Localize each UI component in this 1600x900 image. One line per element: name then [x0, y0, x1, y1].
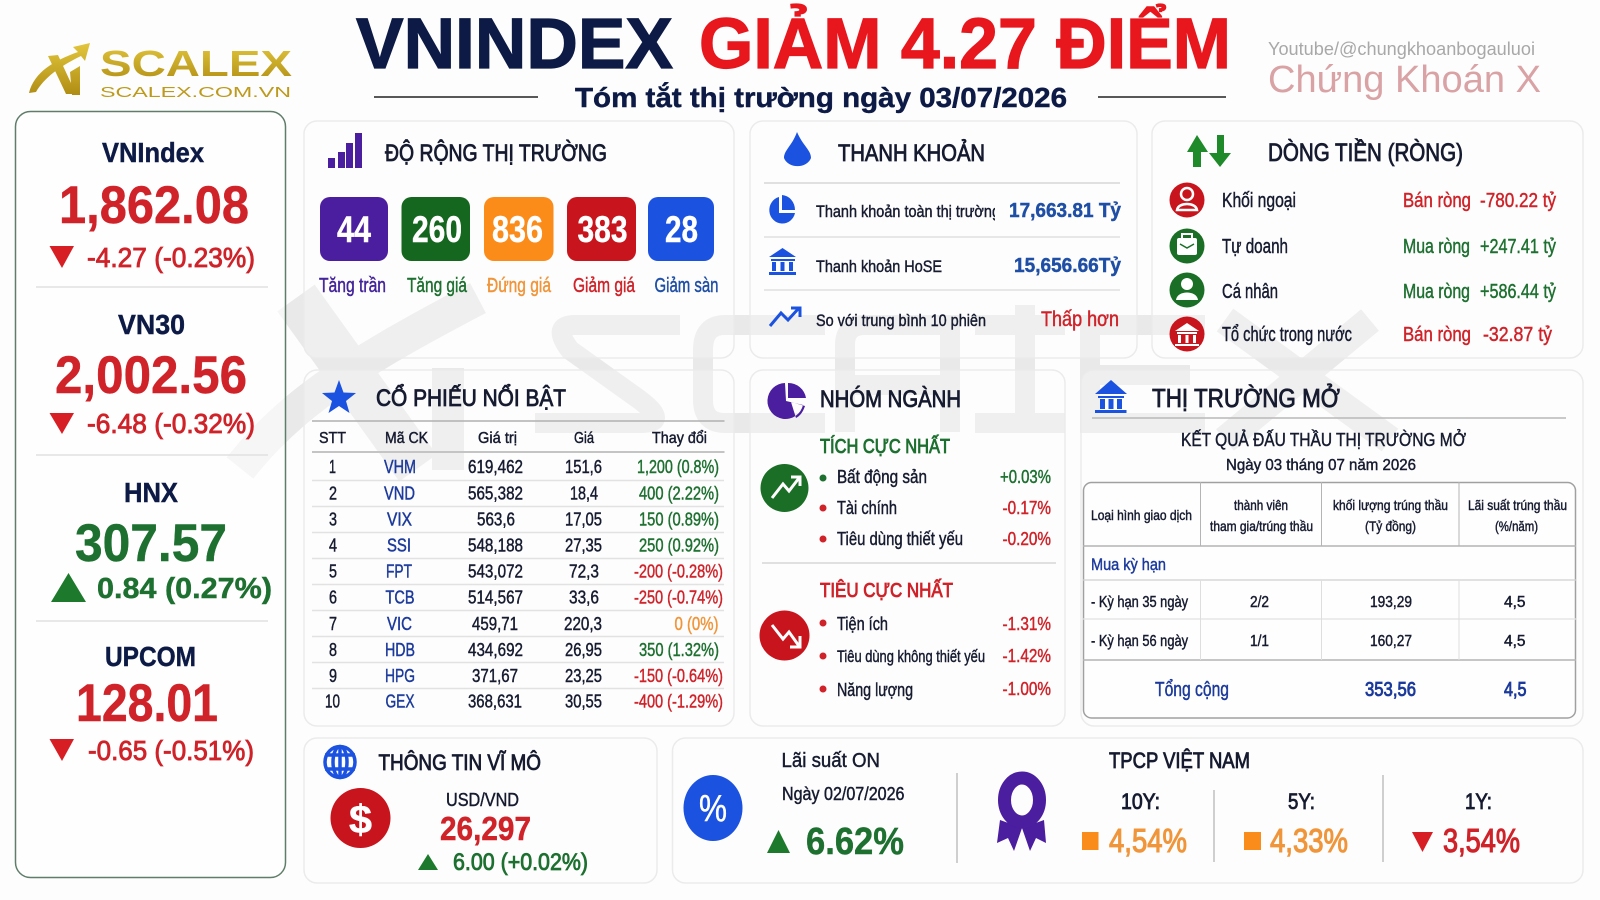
- auction table: [1083, 482, 1576, 718]
- table date: Ngày 03 tháng 07 năm 2026: [1226, 457, 1416, 474]
- row 3: 150 (0.89%): [639, 510, 719, 530]
- row: 56 days: 4,5: [1504, 633, 1526, 650]
- row: 35 days: 2/2: [1250, 594, 1269, 611]
- heading: THÔNG TIN VĨ MÔ: [378, 750, 541, 775]
- stat: ceiling: [319, 197, 388, 297]
- title: index name: VNINDEX: [356, 5, 673, 84]
- row 2: 400 (2.22%): [639, 484, 719, 504]
- row: 56 days: [1091, 633, 1526, 650]
- row: individuals: [1170, 272, 1556, 308]
- row 1: 1,200 (0.8%): [637, 457, 719, 477]
- logo: SCALEX: [29, 43, 292, 101]
- row: 35 days: 193,29: [1370, 594, 1412, 611]
- UPCOM block: -0.65 (-0.51%): [88, 735, 254, 766]
- worst sectors: Tiêu dùng không thiết yếu: [837, 647, 985, 666]
- HNX block: HNX: [124, 477, 178, 508]
- watermark: SCALEX logo: [240, 298, 1390, 470]
- UPCOM block: UPCOM: [105, 641, 196, 672]
- icon: drop: [784, 132, 811, 166]
- icon: up and down arrows: [1187, 135, 1231, 167]
- row: domestic institutions: [1170, 316, 1552, 352]
- VNIndex block: -4.27 (-0.23%): [87, 242, 255, 273]
- row 2: 2: [329, 484, 337, 504]
- bond 10Y: [1082, 789, 1187, 859]
- row: total: [1155, 679, 1526, 701]
- table header: Thay đổi: [652, 429, 707, 447]
- stat: flat: [484, 197, 554, 297]
- row: 10 session comparison: [770, 308, 1119, 331]
- row 4: 4: [329, 536, 337, 556]
- row 5: FPT: [386, 562, 412, 582]
- row 5: 5: [329, 562, 337, 582]
- row 1: VHM: [384, 457, 416, 477]
- overnight rate: Ngày 02/07/2026: [782, 784, 904, 804]
- row: proprietary: Mua ròng: [1403, 236, 1470, 258]
- table header: tham gia/trúng thầu: [1210, 518, 1313, 534]
- worst sectors: -1.42%: [1002, 646, 1051, 666]
- title: [356, 4, 1231, 84]
- row: HoSE: 15,656.66Tỷ: [1014, 255, 1122, 277]
- row: foreign: [1170, 182, 1556, 218]
- VNIndex block: [50, 137, 255, 273]
- best sectors: [760, 435, 1051, 549]
- row 10: -400 (-1.29%): [634, 692, 723, 712]
- logo wordmark: SCALEX: [100, 43, 292, 84]
- row: proprietary: [1170, 228, 1556, 264]
- stat: up: Tăng giá: [407, 275, 468, 297]
- stat: down: Giảm giá: [573, 275, 636, 297]
- row: foreign: -780.22 tỷ: [1480, 190, 1556, 212]
- row: proprietary: Tự doanh: [1222, 236, 1288, 258]
- row 5: 72,3: [569, 562, 599, 582]
- USD/VND stat: 26,297: [440, 810, 531, 847]
- bond 1Y: 1Y:: [1465, 789, 1492, 814]
- heading: CỔ PHIẾU NỔI BẬT: [376, 384, 566, 412]
- heading: THỊ TRƯỜNG MỞ: [1152, 382, 1340, 413]
- table header: Giá: [574, 430, 594, 447]
- row: 56 days: 1/1: [1250, 633, 1269, 650]
- VNIndex block: VNIndex: [102, 137, 204, 168]
- row 8: HDB: [385, 640, 415, 660]
- icon: ribbon: [997, 778, 1046, 851]
- row 5: 543,072: [468, 562, 523, 582]
- row 8: 8: [329, 640, 337, 660]
- bond 10Y: 10Y:: [1121, 789, 1160, 814]
- row 4: [329, 536, 719, 556]
- panel: net cash flow: [1152, 121, 1583, 358]
- stat: down: 383: [578, 209, 628, 250]
- panel: indices: [16, 112, 286, 878]
- stat: flat: Đứng giá: [487, 275, 552, 297]
- worst sectors: -1.00%: [1002, 679, 1051, 699]
- row 2: 565,382: [468, 484, 523, 504]
- row: 56 days: - Kỳ hạn 56 ngày: [1091, 633, 1188, 650]
- row: foreign: Bán ròng: [1403, 190, 1471, 212]
- row 6: 514,567: [468, 588, 523, 608]
- row: 56 days: 160,27: [1370, 633, 1412, 650]
- HNX block: 307.57: [75, 514, 227, 573]
- worst sectors: TIÊU CỰC NHẤT: [820, 579, 953, 602]
- row 2: [329, 484, 719, 504]
- row 10: 368,631: [468, 692, 522, 712]
- row 9: 371,67: [472, 666, 518, 686]
- row: whole market: Thanh khoản toàn thị trường: [816, 202, 1000, 221]
- heading: THANH KHOẢN: [838, 138, 985, 167]
- row: total: 4,5: [1504, 679, 1526, 701]
- row 1: 1: [329, 457, 336, 477]
- row 10: GEX: [386, 692, 414, 712]
- VNIndex block: 1,862.08: [59, 176, 249, 235]
- row: individuals: Mua ròng: [1403, 281, 1470, 303]
- row 8: [329, 640, 719, 660]
- section label: Mua kỳ hạn: [1091, 555, 1166, 574]
- VN30 block: 2,002.56: [55, 346, 247, 405]
- row: total: Tổng cộng: [1155, 679, 1229, 701]
- row: 35 days: - Kỳ hạn 35 ngày: [1091, 594, 1188, 611]
- channel name: Chứng Khoán X: [1268, 59, 1541, 101]
- row 10: 10: [325, 692, 340, 712]
- row 1: 151,6: [565, 457, 602, 477]
- table header: thành viên: [1234, 497, 1288, 513]
- table header: Giá trị: [478, 430, 517, 447]
- best sectors: -0.17%: [1002, 498, 1051, 518]
- USD/VND stat: 6.00 (+0.02%): [453, 849, 588, 876]
- row: whole market: 17,663.81 Tỷ: [1009, 200, 1122, 222]
- table header: Lãi suất trúng thầu: [1468, 497, 1567, 513]
- subtitle: Tóm tắt thị trường ngày 03/07/2026: [575, 82, 1067, 113]
- worst sectors: [760, 579, 1051, 700]
- worst sectors: -1.31%: [1002, 614, 1051, 634]
- row 5: [329, 562, 723, 582]
- worst sectors: Năng lượng: [837, 680, 913, 700]
- channel credit: [1268, 39, 1541, 101]
- panel: liquidity: [750, 121, 1137, 358]
- UPCOM block: 128.01: [76, 674, 218, 733]
- icon: dollar: [330, 788, 390, 848]
- row: foreign: Khối ngoại: [1222, 190, 1296, 212]
- UPCOM block: [50, 641, 254, 766]
- table header: STT: [319, 430, 346, 447]
- icon: bank: [1095, 380, 1127, 413]
- row 7: [329, 614, 718, 634]
- heading: ĐỘ RỘNG THỊ TRƯỜNG: [385, 139, 607, 167]
- row: 10 session comparison: So với trung bình 10 phiên: [816, 311, 986, 330]
- row 6: TCB: [386, 588, 414, 608]
- icon: star: [322, 380, 356, 413]
- best sectors: +0.03%: [1000, 467, 1051, 487]
- icon: percent: %: [699, 788, 727, 830]
- row 7: 459,71: [472, 614, 518, 634]
- row: proprietary: +247.41 tỷ: [1480, 236, 1556, 258]
- overnight rate: Lãi suất ON: [782, 750, 880, 772]
- HNX block: [51, 477, 272, 605]
- row 3: 563,6: [477, 510, 515, 530]
- table rows: [312, 457, 724, 712]
- row 7: 7: [329, 614, 337, 634]
- row: domestic institutions: Bán ròng: [1403, 324, 1471, 346]
- VN30 block: [50, 309, 255, 439]
- panel: market breadth: [304, 121, 734, 358]
- icon: dollar: $: [349, 798, 372, 842]
- row 3: [329, 510, 719, 530]
- stat: ceiling: Tăng trần: [319, 275, 386, 297]
- row 1: 619,462: [468, 457, 523, 477]
- best sectors: Bất động sản: [837, 467, 927, 487]
- overnight rate: 6.62%: [806, 821, 904, 863]
- row: domestic institutions: Tổ chức trong nước: [1222, 324, 1352, 346]
- best sectors: Tài chính: [837, 498, 897, 518]
- best sectors: Tiêu dùng thiết yếu: [837, 529, 963, 549]
- heading: NHÓM NGÀNH: [820, 386, 961, 413]
- panel: rates and bonds: [672, 738, 1583, 883]
- row 3: 17,05: [565, 510, 602, 530]
- bond 1Y: [1412, 789, 1520, 859]
- panel: open market: [1081, 370, 1583, 726]
- bond 1Y: 3,54%: [1443, 822, 1520, 859]
- stat: up: [402, 197, 470, 297]
- logo mark: [29, 43, 90, 95]
- table title: KẾT QUẢ ĐẤU THẦU THỊ TRƯỜNG MỞ: [1181, 429, 1466, 450]
- worst sectors: Tiện ích: [837, 614, 888, 634]
- row 1: [329, 457, 719, 477]
- row 6: 6: [329, 588, 337, 608]
- stat: flat: 836: [492, 209, 543, 250]
- bond 5Y: 4,33%: [1270, 822, 1348, 859]
- row 9: 9: [329, 666, 337, 686]
- row 10: [325, 692, 723, 712]
- row 8: 26,95: [565, 640, 602, 660]
- row 6: 33,6: [569, 588, 599, 608]
- row 7: 220,3: [564, 614, 602, 634]
- row 6: -250 (-0.74%): [634, 588, 723, 608]
- table header: Loại hình giao dịch: [1091, 507, 1192, 523]
- bond 10Y: 4,54%: [1109, 822, 1187, 859]
- row: whole market: [769, 195, 1122, 224]
- USD/VND stat: [418, 790, 588, 876]
- row 4: SSI: [387, 536, 411, 556]
- row 9: 23,25: [565, 666, 602, 686]
- row 3: VIX: [387, 510, 412, 530]
- row 8: 434,692: [468, 640, 523, 660]
- logo url: SCALEX.COM.VN: [100, 84, 291, 101]
- overnight rate: [767, 750, 904, 863]
- VN30 block: -6.48 (-0.32%): [87, 408, 255, 439]
- icon: pie: [767, 383, 806, 419]
- row: individuals: Cá nhân: [1222, 281, 1278, 303]
- row: 10 session comparison: Thấp hơn: [1041, 308, 1119, 331]
- table header: (%/năm): [1495, 518, 1538, 534]
- row: domestic institutions: -32.87 tỷ: [1483, 324, 1552, 346]
- row 3: 3: [329, 510, 337, 530]
- panel: sectors: [750, 370, 1065, 726]
- table header: khối lượng trúng thầu: [1333, 497, 1448, 513]
- row 7: VIC: [387, 614, 412, 634]
- best sectors: -0.20%: [1002, 529, 1051, 549]
- panel: macro info: [304, 738, 657, 883]
- stat: floor: 28: [665, 209, 698, 250]
- row: individuals: +586.44 tỷ: [1480, 281, 1556, 303]
- stat: down: [567, 197, 636, 297]
- title: change: GIẢM 4.27 ĐIỂM: [699, 4, 1231, 84]
- heading: DÒNG TIỀN (RÒNG): [1268, 138, 1463, 167]
- table header: Mã CK: [385, 430, 428, 447]
- row: total: 353,56: [1365, 679, 1416, 701]
- row 2: 18,4: [570, 484, 598, 504]
- bond 5Y: 5Y:: [1288, 789, 1315, 814]
- table header: [319, 429, 707, 447]
- stat: ceiling: 44: [337, 209, 371, 250]
- row 7: 0 (0%): [674, 614, 718, 634]
- stat: floor: [648, 197, 718, 297]
- youtube handle: Youtube/@chungkhoanbogauluoi: [1268, 39, 1535, 59]
- row 5: -200 (-0.28%): [634, 562, 723, 582]
- row 9: [329, 666, 723, 686]
- row 4: 250 (0.92%): [639, 536, 719, 556]
- HNX block: 0.84 (0.27%): [97, 573, 272, 605]
- panel: featured stocks: [304, 370, 734, 726]
- row 4: 27,35: [565, 536, 602, 556]
- icon: globe: [325, 746, 355, 778]
- table header: [1091, 497, 1567, 534]
- VN30 block: VN30: [118, 309, 185, 340]
- bond 5Y: [1244, 789, 1348, 859]
- row 4: 548,188: [468, 536, 523, 556]
- row 6: [329, 588, 723, 608]
- row 2: VND: [384, 484, 415, 504]
- row: 35 days: 4,5: [1504, 594, 1526, 611]
- row: HoSE: Thanh khoản HoSE: [816, 257, 942, 276]
- row 8: 350 (1.32%): [639, 640, 719, 660]
- icon: bars: [328, 133, 362, 168]
- row 9: -150 (-0.64%): [634, 666, 723, 686]
- USD/VND stat: USD/VND: [446, 790, 519, 810]
- best sectors: TÍCH CỰC NHẤT: [820, 435, 950, 458]
- row: HoSE: [769, 248, 1122, 277]
- bonds heading: TPCP VIỆT NAM: [1109, 748, 1250, 773]
- row 9: HPG: [385, 666, 415, 686]
- stat: floor: Giảm sàn: [654, 275, 718, 297]
- stat: up: 260: [412, 209, 462, 250]
- icon: percent: [684, 775, 742, 841]
- table header: (Tỷ đồng): [1365, 518, 1416, 534]
- row: 35 days: [1091, 594, 1526, 611]
- row 10: 30,55: [565, 692, 602, 712]
